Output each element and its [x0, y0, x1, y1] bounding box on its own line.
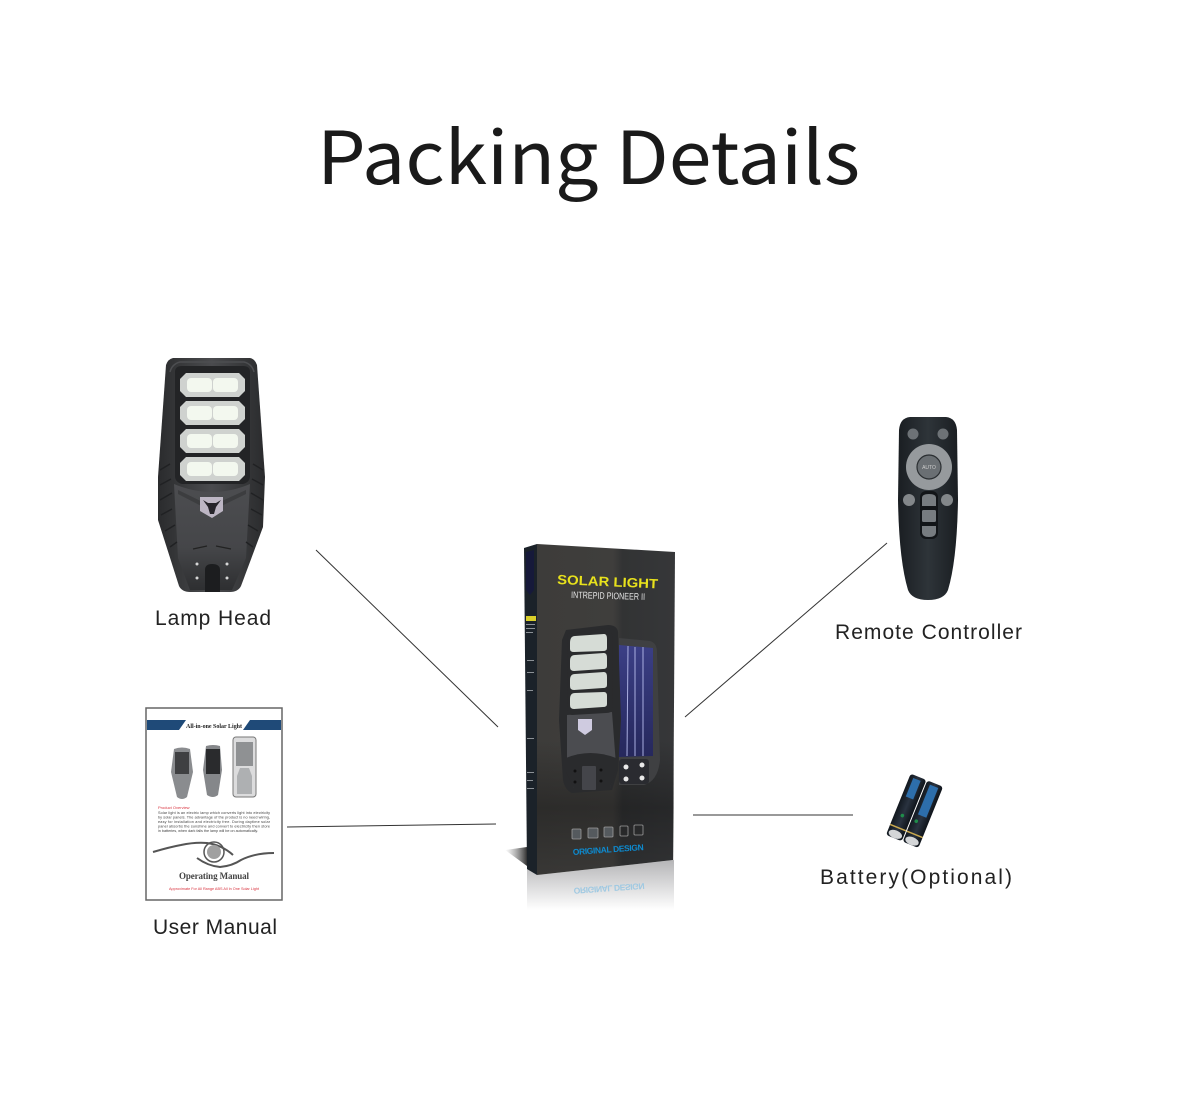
remote side buttons	[903, 494, 953, 506]
manual emblem	[153, 842, 274, 867]
box subheading: INTREPID PIONEER II	[571, 590, 645, 603]
icon: batteries	[886, 774, 943, 848]
lamp LED panels	[180, 373, 245, 481]
box reflection: ORIGINAL DESIGN	[573, 881, 645, 896]
product box	[505, 544, 675, 910]
manual overview text: easy for installation and electricity free. During daytime solar	[158, 820, 271, 824]
connector: user manual to box	[287, 824, 496, 827]
box heading: SOLAR LIGHT	[557, 572, 659, 591]
icon: lamp head	[158, 358, 265, 592]
lamp mount	[205, 564, 220, 592]
manual title: Operating Manual	[179, 871, 249, 881]
manual overview text: by solar panels. The advantage of the product is no need wiring,	[158, 816, 270, 820]
manual overview text: in batteries, when dark falls the lamp will be on automatically.	[158, 829, 258, 833]
manual overview text: Product Overview	[158, 805, 190, 810]
label: user manual: User Manual	[153, 916, 277, 939]
manual lamp illustrations	[171, 737, 256, 799]
icon: user manual: Approximate For All Range ABS All In One Solar Light	[169, 887, 260, 891]
title: Packing Details	[317, 100, 860, 206]
remote center buttons	[920, 491, 938, 539]
box spine	[524, 544, 537, 875]
connector: battery to box	[693, 814, 853, 816]
connector: remote controller to box	[685, 543, 887, 717]
remote top buttons	[908, 428, 948, 440]
label: lamp head: Lamp Head	[155, 607, 271, 630]
remote wheel	[906, 444, 952, 490]
box shadow	[505, 847, 527, 866]
connector: lamp head to box	[316, 550, 498, 727]
icon: remote controller	[898, 417, 958, 600]
spine details	[526, 550, 536, 789]
box front face	[537, 544, 675, 875]
box feature icons	[572, 825, 643, 839]
lamp logo	[200, 497, 223, 518]
icon: user manual	[146, 708, 282, 900]
manual header band	[147, 720, 281, 730]
box lamp image	[559, 625, 621, 793]
label: remote controller: Remote Controller	[835, 621, 1022, 644]
remote wheel: AUTO	[922, 465, 936, 471]
box slogan: ORIGINAL DESIGN	[572, 842, 644, 857]
manual overview text: panel absorbs the sunshine and convert to electricity then store	[158, 824, 270, 828]
manual overview text	[158, 805, 271, 833]
label: battery: Battery(Optional)	[820, 866, 1012, 889]
manual overview text: Solar light is an electric lamp which converts light into electricity	[158, 811, 270, 815]
box solar panel	[619, 638, 660, 785]
manual header band: All-in-one Solar Light	[186, 724, 242, 730]
box reflection	[527, 860, 674, 910]
